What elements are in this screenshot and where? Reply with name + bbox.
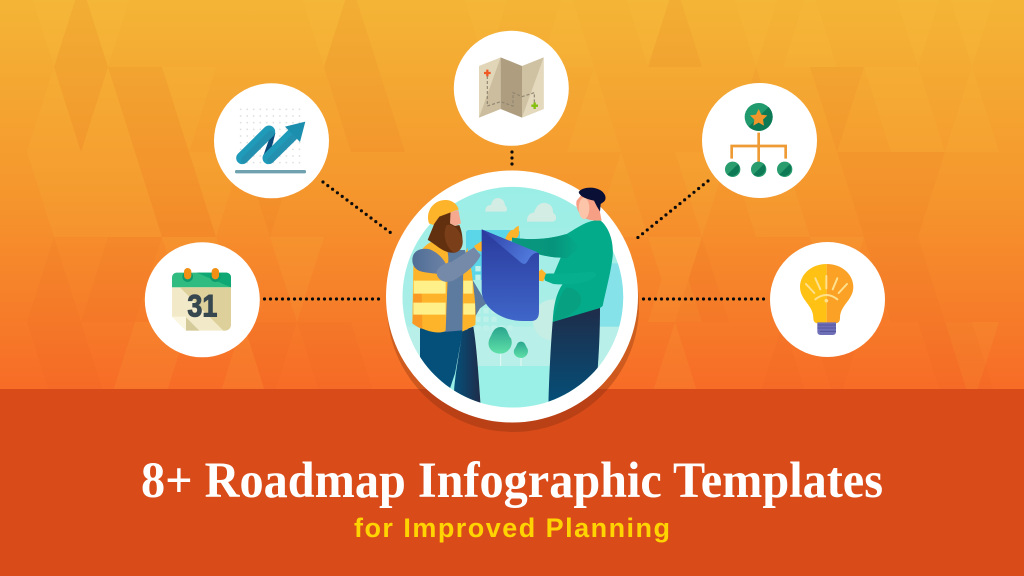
far glove xyxy=(505,226,519,241)
central illustration circle xyxy=(386,170,639,432)
title: 8+ Roadmap Infographic Templates xyxy=(141,453,883,509)
man pants xyxy=(548,307,600,407)
worker glove xyxy=(474,238,490,251)
icon: folded map xyxy=(454,31,569,146)
bottom title band xyxy=(0,389,1024,576)
calendar date: 31 xyxy=(187,289,217,324)
worker head and beard xyxy=(435,210,461,226)
safety vest xyxy=(412,240,448,333)
dotted connectors xyxy=(264,152,766,299)
green sweater xyxy=(512,220,613,322)
icon: light bulb xyxy=(770,242,885,357)
triangle mosaic: darker facets xyxy=(27,0,1024,407)
subtitle: for Improved Planning xyxy=(354,513,670,543)
worker figure xyxy=(412,200,490,333)
triangle mosaic: lighter facets xyxy=(27,0,999,407)
blue map sheet xyxy=(482,229,539,321)
icon: growth chart xyxy=(214,83,329,198)
man hair xyxy=(579,188,606,212)
two figures scene xyxy=(400,183,627,413)
hard hat xyxy=(428,200,459,225)
near glove xyxy=(528,269,546,281)
clouds xyxy=(485,198,556,222)
icon: calendar xyxy=(145,242,260,357)
sky and city backdrop xyxy=(400,183,627,413)
man figure xyxy=(505,188,613,322)
icon: org chart xyxy=(702,83,817,198)
orange gradient background xyxy=(0,0,1024,389)
trees xyxy=(489,327,528,366)
man head xyxy=(576,195,602,221)
worker legs xyxy=(420,327,481,407)
circle drop shadow xyxy=(387,180,639,432)
worker arm xyxy=(412,247,481,282)
